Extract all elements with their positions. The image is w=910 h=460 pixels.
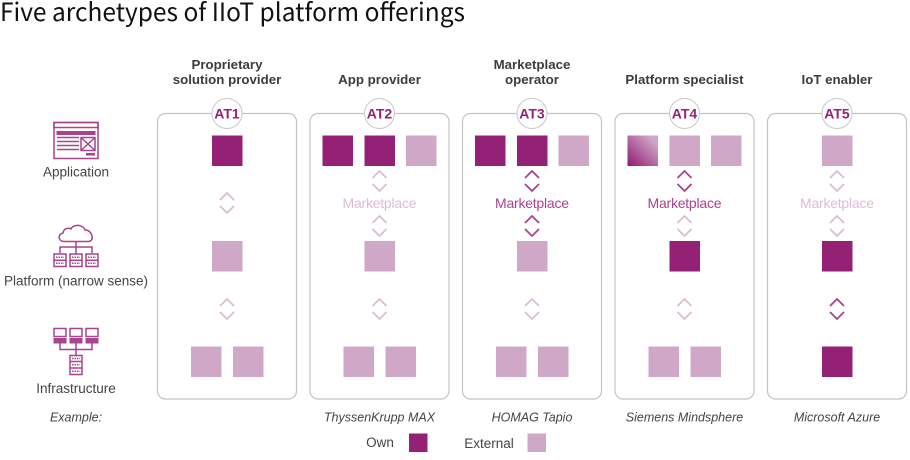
panel — [310, 114, 449, 399]
example: Microsoft Azure — [794, 410, 880, 424]
row label: Platform: Platform (narrow sense) — [4, 274, 148, 288]
marketplace: Marketplace — [495, 195, 569, 211]
platform block — [670, 241, 700, 272]
platform block — [517, 241, 548, 272]
icon: infrastructure network — [54, 328, 98, 374]
heading: operator — [505, 72, 559, 87]
panel — [768, 114, 906, 399]
badge — [822, 98, 852, 128]
column AT3 — [462, 57, 602, 424]
badge — [517, 98, 547, 128]
chevrons — [525, 299, 539, 319]
badge: AT5 — [824, 106, 850, 122]
chevrons — [220, 299, 234, 319]
example: HOMAG Tapio — [492, 410, 572, 424]
marketplace: Marketplace — [800, 195, 874, 211]
column AT4 — [615, 72, 754, 424]
row label: Infrastructure — [36, 328, 116, 396]
example: ThyssenKrupp MAX — [324, 410, 436, 424]
badge: AT3 — [519, 106, 545, 122]
row label: Application: Application — [43, 164, 109, 180]
row label: Infrastructure: Infrastructure — [36, 381, 116, 396]
infrastructure blocks — [344, 346, 416, 377]
legend: Own — [366, 435, 394, 450]
infrastructure blocks — [496, 346, 568, 377]
chevrons — [830, 299, 844, 319]
application blocks — [322, 136, 436, 166]
chevrons — [678, 299, 692, 319]
badge: AT4 — [672, 106, 697, 122]
platform block — [364, 241, 395, 272]
badge — [670, 98, 700, 128]
chevrons — [525, 171, 539, 191]
heading: Platform specialist — [625, 72, 744, 87]
heading: solution provider — [173, 72, 281, 87]
platform block — [822, 241, 852, 272]
heading: Marketplace — [494, 57, 570, 72]
heading: IoT enabler — [802, 72, 872, 87]
example: Siemens Mindsphere — [626, 410, 743, 424]
panel — [615, 114, 754, 399]
panel — [158, 114, 296, 399]
row label: Application — [43, 122, 109, 180]
chevrons — [830, 171, 844, 191]
chevrons — [678, 216, 692, 236]
application blocks — [475, 136, 589, 166]
infrastructure blocks — [648, 346, 721, 377]
panel — [462, 114, 602, 399]
legend — [366, 434, 546, 452]
icon: application window — [54, 122, 98, 158]
application block — [822, 136, 852, 166]
column AT2 — [310, 72, 449, 424]
column AT5 — [768, 72, 906, 424]
legend: External — [464, 436, 514, 451]
infrastructure blocks — [191, 346, 264, 377]
platform block — [212, 241, 242, 272]
chevrons — [525, 216, 539, 236]
chevrons — [220, 193, 234, 213]
infrastructure block — [822, 346, 852, 377]
badge: AT2 — [367, 106, 392, 122]
application block — [212, 136, 242, 166]
chevrons — [830, 216, 844, 236]
badge — [212, 98, 242, 128]
column AT1 — [158, 57, 296, 399]
example label: Example: — [50, 410, 102, 424]
row label: Platform — [4, 225, 148, 288]
chevrons — [372, 216, 386, 236]
chevrons — [372, 171, 386, 191]
heading: App provider — [338, 72, 421, 87]
badge — [364, 98, 394, 128]
icon: cloud platform — [54, 225, 98, 266]
marketplace: Marketplace — [648, 195, 722, 211]
heading: Proprietary — [192, 57, 263, 72]
chevrons — [372, 299, 386, 319]
marketplace: Marketplace — [342, 195, 417, 211]
badge: AT1 — [214, 106, 240, 122]
application blocks — [628, 136, 742, 166]
chevrons — [678, 171, 692, 191]
